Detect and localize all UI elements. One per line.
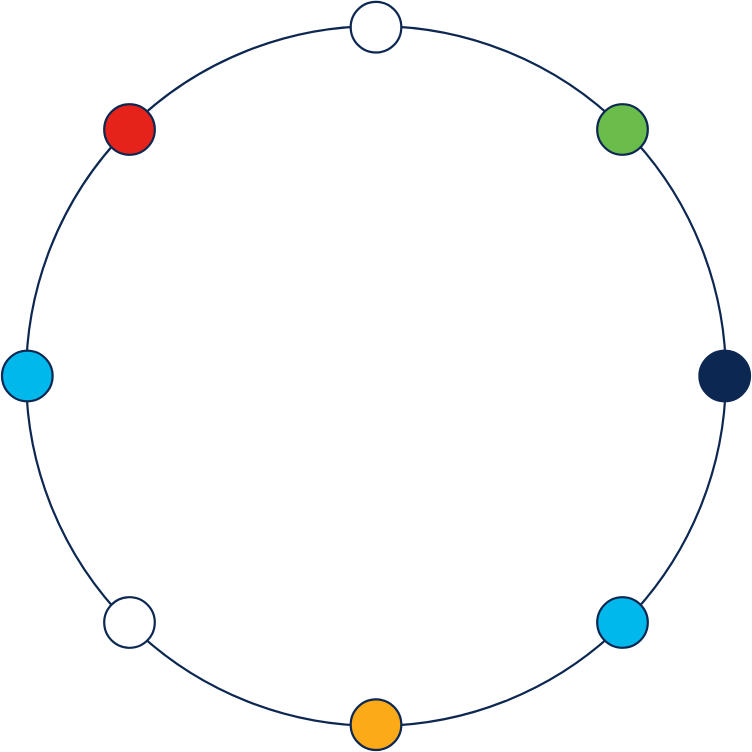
node: right navy — [699, 351, 750, 401]
node: bottom-left white — [104, 597, 155, 648]
node: top-right green — [597, 104, 648, 155]
node: bottom orange — [351, 699, 401, 750]
node: left blue — [2, 351, 53, 401]
node: top white — [351, 2, 401, 52]
node: top-left red — [104, 104, 155, 155]
node: bottom-right blue — [597, 597, 648, 648]
